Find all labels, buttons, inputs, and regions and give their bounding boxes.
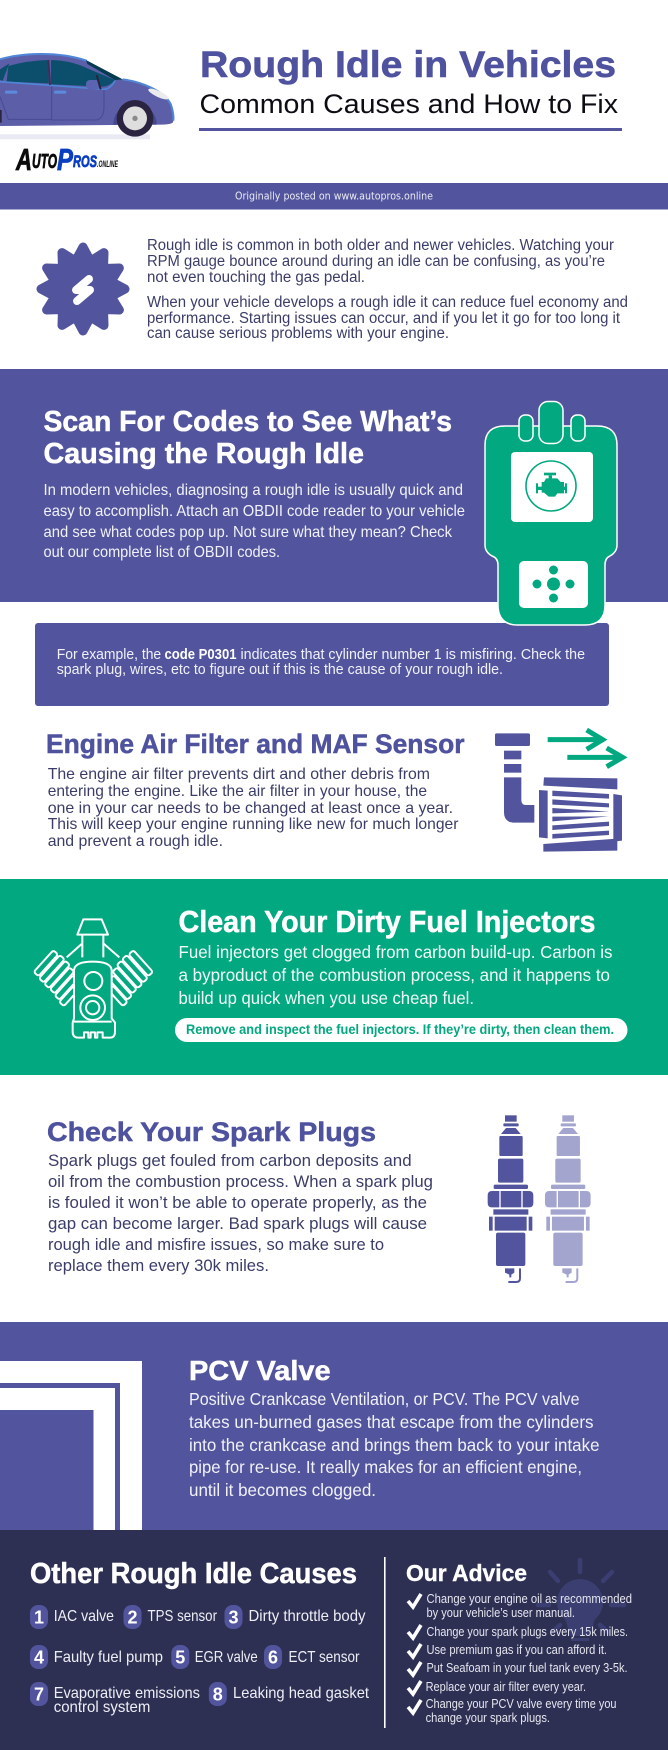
icon: dark spark plug [488,1115,533,1282]
intro text: Rough idle is common in both older and newer vehicles. Watching your [147,237,614,254]
causes list [30,1605,370,1716]
fuel injector body text: a byproduct of the combustion process, and it happens to [178,965,610,985]
causes list: 1 [34,1608,44,1628]
air filter body text: This will keep your engine running like new for much longer [48,816,459,833]
spark plug body text: oil from the combustion process. When a spark plug [48,1173,433,1191]
icon: engine outline [34,919,153,1038]
heading: scan for codes: Scan For Codes to See What’s [44,406,452,438]
PCV body text: until it becomes clogged. [189,1480,376,1500]
icon: OBDII code reader [485,402,617,625]
causes list: 5 [175,1648,185,1668]
scan body text: out our complete list of OBDII codes. [44,544,280,561]
PCV body text: into the crankcase and brings them back to your intake [189,1435,600,1455]
logo: AutoPros.Online: UTO [32,151,57,173]
causes list: Dirty throttle body [248,1608,366,1625]
causes list: control system [54,1699,150,1716]
causes list: 8 [213,1684,223,1704]
divider line [384,1557,386,1728]
causes list: 4 [34,1648,44,1668]
heading: PCV valve: PCV Valve [189,1355,331,1386]
causes list: 2 [127,1608,138,1628]
heading: our advice: Our Advice [406,1560,527,1586]
spark plug body text: is fouled it won’t be able to operate properly, as the [48,1194,427,1212]
scan body text [44,482,465,561]
spark plug body text: Spark plugs get fouled from carbon deposits and [48,1152,412,1170]
logo: AutoPros.Online: P [57,142,73,177]
heading: spark plugs: Check Your Spark Plugs [47,1117,376,1147]
section: engine air filter [46,729,465,850]
causes list: 3 [228,1608,239,1628]
causes list: 7 [34,1684,44,1704]
PCV body text [189,1389,600,1500]
scan body text: easy to accomplish. Attach an OBDII code reader to your vehicle [44,503,465,520]
causes list: ECT sensor [288,1649,360,1666]
fuel injector body text [178,942,613,1008]
panel: other causes and advice [0,1530,668,1750]
intro text: RPM gauge bounce around during an idle can be confusing, as you’re [147,253,605,270]
callout pill: Remove and inspect the fuel injectors. If they’re dirty, then clean them. [186,1021,614,1037]
PCV body text: pipe for re-use. It really makes for an efficient engine, [189,1457,582,1477]
advice checklist: Put Seafoam in your fuel tank every 3-5k. [426,1661,628,1675]
PCV body text: takes un-burned gases that escape from the cylinders [189,1412,594,1432]
advice checklist [408,1592,632,1725]
PCV body text: Positive Crankcase Ventilation, or PCV. The PCV valve [189,1389,580,1409]
callout: code P0301: code P0301 [164,646,236,663]
intro text [147,237,628,342]
logo: AutoPros.Online: ROS [73,152,97,171]
advice checklist: Change your engine oil as recommended [426,1592,632,1606]
panel: scan for codes [0,369,668,602]
nested square frames [0,1361,142,1530]
subtitle: Common Causes and How to Fix [200,89,619,119]
intro text: performance. Starting issues can occur, and if you let it go for too long it [147,310,621,327]
intro text: not even touching the gas pedal. [147,269,365,286]
air filter body text: entering the engine. Like the air filter in your house, the [48,783,427,800]
logo: AutoPros.Online: .ONLINE [97,159,119,169]
causes list: 6 [268,1648,278,1668]
intro text: can cause serious problems with your engine. [147,325,449,342]
icon: gear with bolt [41,247,125,331]
icon: light spark plug [545,1115,591,1282]
callout: code P0301: For example, the [57,646,161,663]
causes list: EGR valve [195,1649,258,1666]
air filter body text: The engine air filter prevents dirt and other debris from [48,766,430,783]
advice checklist: Use premium gas if you can afford it. [426,1643,607,1657]
callout: code P0301: indicates that cylinder number 1 is misfiring. Check the [240,646,585,663]
causes list: Faulty fuel pump [54,1649,163,1666]
spark plug body text: replace them every 30k miles. [48,1257,269,1275]
causes list: Leaking head gasket [233,1685,370,1702]
spark plug body text [48,1152,433,1275]
fuel injector body text: build up quick when you use cheap fuel. [178,988,474,1008]
causes list: Evaporative emissions [54,1685,200,1702]
panel: fuel injectors [0,879,668,1075]
causes list: IAC valve [54,1608,114,1625]
source band [0,183,668,210]
title [200,44,619,119]
header: car illustration [0,54,174,139]
air filter body text: one in your car needs to be changed at least once a year. [48,800,453,817]
intro text: When your vehicle develops a rough idle it can reduce fuel economy and [147,294,628,311]
logo: AutoPros.Online [15,142,119,177]
icon: air filter and arrows [495,730,623,852]
spark plug body text: gap can become larger. Bad spark plugs will cause [48,1215,427,1233]
scan body text: and see what codes pop up. Not sure what they mean? Check [44,524,453,541]
callout: code P0301: spark plug, wires, etc to figure out if this is the cause of your rough idle. [57,661,503,678]
heading: scan for codes: Causing the Rough Idle [44,438,364,470]
source band: Originally posted on www.autopros.online [235,190,433,202]
logo: AutoPros.Online: A [15,142,32,177]
section: spark plugs [47,1117,433,1275]
air filter body text: and prevent a rough idle. [48,833,223,850]
icon: faint lightbulb [538,1560,624,1641]
heading: air filter: Engine Air Filter and MAF Sensor [46,729,465,759]
heading: other causes: Other Rough Idle Causes [30,1558,357,1590]
advice checklist: change your spark plugs. [426,1711,550,1725]
heading: scan for codes [44,406,452,470]
heading: fuel injectors: Clean Your Dirty Fuel Injectors [178,905,596,939]
callout: code P0301 [35,623,609,706]
advice checklist: Change your PCV valve every time you [426,1697,617,1711]
advice checklist: Replace your air filter every year. [426,1680,586,1694]
advice checklist: Change your spark plugs every 15k miles. [426,1625,628,1639]
panel: PCV valve [0,1322,668,1530]
callout pill [175,1018,628,1042]
air filter body text [48,766,459,850]
scan body text: In modern vehicles, diagnosing a rough idle is usually quick and [44,482,463,499]
causes list: TPS sensor [148,1608,218,1625]
title rule [199,128,622,131]
fuel injector body text: Fuel injectors get clogged from carbon build-up. Carbon is [178,942,613,962]
advice checklist: by your vehicle’s user manual. [426,1606,575,1620]
title: Rough Idle in Vehicles [200,44,616,85]
spark plug body text: rough idle and misfire issues, so make sure to [48,1236,384,1254]
